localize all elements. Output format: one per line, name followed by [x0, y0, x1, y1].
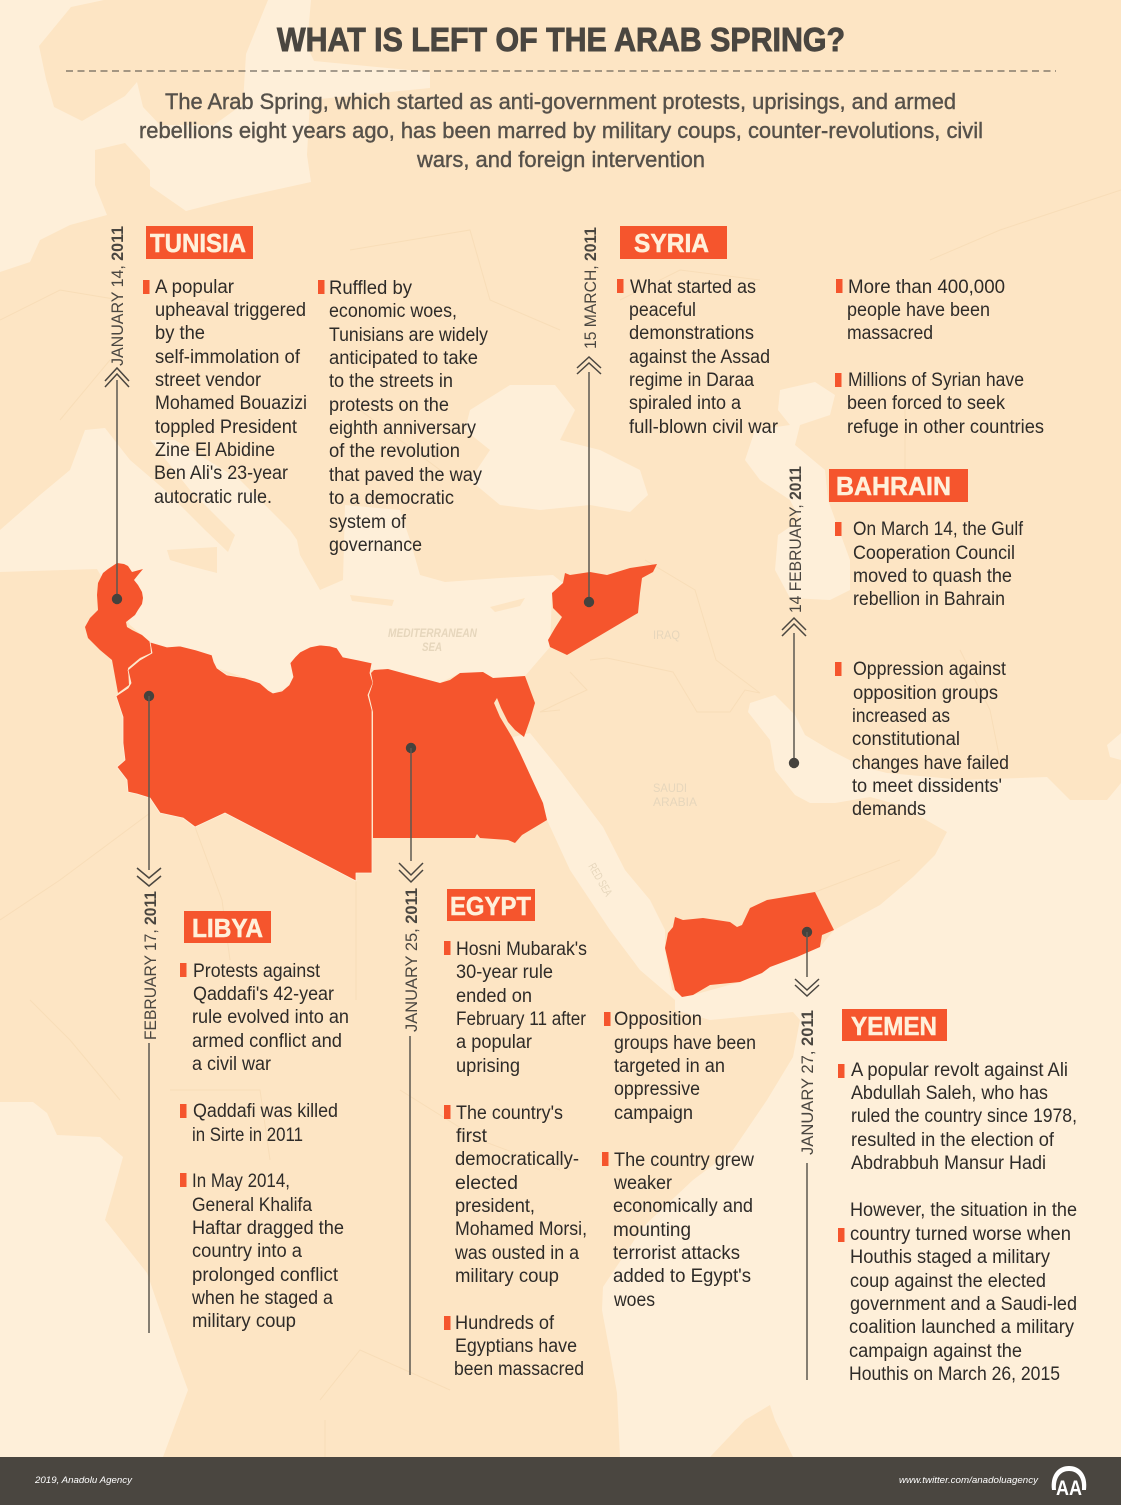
text block: Yemen: Abdrabbuh Mansur Hadi — [851, 1153, 1046, 1174]
intro text: The Arab Spring, which started as anti-government protests, uprisings, and armed — [165, 89, 956, 114]
heading: Libya: LIBYA — [192, 913, 263, 943]
text block: Libya: Haftar dragged the — [192, 1218, 344, 1239]
footer: credit: 2019, Anadolu Agency — [34, 1475, 133, 1486]
timeline: Syria date and pointer: 15 MARCH, 2011 — [581, 227, 600, 349]
country: Syria — [548, 564, 657, 655]
text block: Libya: military coup — [192, 1311, 296, 1332]
text block: Tunisia first column: A popular — [155, 277, 235, 298]
text block: Yemen: campaign against the — [849, 1341, 1022, 1362]
text block: Tunisia second column: Tunisians are widely — [329, 325, 488, 346]
text block: Egypt first column: elected — [455, 1173, 518, 1194]
text block: Yemen: Houthis staged a military — [850, 1247, 1050, 1268]
icon: Anadolu Agency logo: AA — [1056, 1477, 1082, 1500]
text block: Egypt first column: Hosni Mubarak's — [456, 939, 587, 960]
text block: Tunisia second column — [318, 278, 488, 556]
text block: Egypt second column — [602, 1009, 756, 1311]
text block: Tunisia second column: anticipated to take — [329, 348, 478, 369]
text block: Tunisia first column — [143, 277, 307, 508]
text block: Egypt first column: democratically- — [455, 1149, 579, 1170]
text block: Egypt second column: groups have been — [614, 1033, 756, 1054]
text block: Egypt first column: uprising — [456, 1056, 520, 1077]
text block: Yemen: resulted in the election of — [851, 1130, 1055, 1151]
timeline: Libya date and pointer — [137, 691, 161, 1333]
text block: Egypt second column: weaker — [613, 1173, 673, 1194]
text block: Tunisia second column: protests on the — [329, 395, 449, 416]
text block: Tunisia second column: system of — [329, 512, 407, 533]
text block: Bahrain: opposition groups — [853, 683, 998, 704]
text block: Syria second column: people have been — [847, 300, 990, 321]
text block: Bahrain: rebellion in Bahrain — [853, 589, 1005, 610]
intro text — [139, 89, 983, 172]
text block: Syria first column: full-blown civil war — [629, 417, 779, 438]
text block: Bahrain: to meet dissidents' — [852, 776, 1002, 797]
panel: Libya — [137, 691, 349, 1333]
text block: Syria second column: massacred — [847, 323, 933, 344]
text block: Tunisia second column: governance — [329, 535, 422, 556]
text block: Syria second column — [835, 277, 1044, 438]
intro text: wars, and foreign intervention — [416, 147, 705, 172]
text block: Yemen: However, the situation in the — [850, 1200, 1077, 1221]
map label: Red Sea: RED SEA — [585, 862, 614, 899]
country: Tunisia — [85, 563, 151, 693]
text block: Egypt first column: 30-year rule — [456, 962, 553, 983]
text block: Syria first column: What started as — [630, 277, 756, 298]
text block: Tunisia first column: Zine El Abidine — [155, 440, 275, 461]
text block: Tunisia first column: street vendor — [155, 370, 262, 391]
text block: Yemen: country turned worse when — [850, 1224, 1071, 1245]
text block: Egypt first column: been massacred — [454, 1359, 584, 1380]
timeline: Tunisia date and pointer — [105, 226, 129, 604]
footer: social link: www.twitter.com/anadoluagency — [899, 1475, 1039, 1486]
timeline: Bahrain date and pointer: 14 FEBRUARY, 2011 — [786, 466, 805, 613]
highlighted countries map — [85, 563, 834, 997]
text block: Bahrain: increased as — [852, 706, 950, 727]
panel: Syria — [577, 226, 1044, 607]
text block: Libya: prolonged conflict — [192, 1265, 339, 1286]
text block: Bahrain — [835, 519, 1024, 820]
text block: Libya: armed conflict and — [192, 1031, 342, 1052]
text block: Libya: in Sirte in 2011 — [192, 1125, 303, 1146]
text block: Syria first column: spiraled into a — [629, 393, 741, 414]
timeline: Yemen date and pointer — [795, 927, 819, 1380]
panel: Egypt — [399, 743, 756, 1380]
text block: Libya: a civil war — [192, 1054, 272, 1075]
country: Libya — [116, 642, 373, 881]
text block: Syria second column: Millions of Syrian have — [848, 370, 1024, 391]
text block: Tunisia second column: to a democratic — [329, 488, 454, 509]
text block: Libya: country into a — [192, 1241, 302, 1262]
text block: Egypt second column: Opposition — [614, 1009, 702, 1030]
text block: Libya: Protests against — [193, 961, 321, 982]
text block: Libya: when he staged a — [191, 1288, 333, 1309]
text block: Egypt first column: president, — [455, 1196, 535, 1217]
heading: Syria — [620, 226, 727, 259]
country: Egypt — [369, 669, 547, 843]
timeline: Tunisia date and pointer: JANUARY 14, 2011 — [108, 226, 127, 366]
text block: Tunisia second column: that paved the way — [329, 465, 482, 486]
title: WHAT IS LEFT OF THE ARAB SPRING? — [277, 21, 845, 58]
heading: Egypt: EGYPT — [450, 891, 531, 921]
map label: Saudi Arabia: SAUDI — [653, 783, 687, 795]
timeline: Libya date and pointer: FEBRUARY 17, 2011 — [141, 891, 160, 1040]
text block: Egypt second column: targeted in an — [614, 1056, 725, 1077]
text block: Tunisia second column: to the streets in — [329, 371, 453, 392]
text block: Yemen — [838, 1060, 1077, 1385]
text block: Syria first column: demonstrations — [629, 323, 754, 344]
text block: Libya: General Khalifa — [192, 1195, 312, 1216]
text block: Syria first column: against the Assad — [629, 347, 770, 368]
text block: Tunisia first column: toppled President — [155, 417, 298, 438]
text block: Egypt first column: ended on — [456, 986, 532, 1007]
text block: Tunisia second column: Ruffled by — [329, 278, 412, 299]
text block: Tunisia first column: self-immolation of — [155, 347, 301, 368]
heading: Yemen: YEMEN — [851, 1011, 937, 1041]
text block: Tunisia first column: Mohamed Bouazizi — [155, 393, 307, 414]
heading: Syria: SYRIA — [634, 228, 709, 258]
icon: Anadolu Agency logo — [1052, 1466, 1086, 1500]
text block: Egypt first column: was ousted in a — [454, 1243, 579, 1264]
text block: Bahrain: Cooperation Council — [853, 543, 1015, 564]
text block: Bahrain: Oppression against — [853, 659, 1007, 680]
text block: Bahrain: On March 14, the Gulf — [853, 519, 1024, 540]
text block: Egypt first column: a popular — [456, 1032, 533, 1053]
text block: Egypt second column: oppressive — [614, 1079, 700, 1100]
text block: Egypt second column: terrorist attacks — [613, 1243, 740, 1264]
text block: Syria second column: More than 400,000 — [848, 277, 1005, 298]
footer bar — [0, 1457, 1121, 1505]
text block: Syria first column: regime in Daraa — [629, 370, 754, 391]
map label: Mediterranean Sea: SEA — [422, 642, 442, 654]
panel: Bahrain — [782, 466, 1024, 820]
text block: Libya — [180, 961, 349, 1332]
country: Yemen — [665, 892, 834, 997]
text block: Tunisia first column: autocratic rule. — [154, 487, 272, 508]
text block: Egypt second column: woes — [613, 1290, 655, 1311]
heading: Tunisia: TUNISIA — [150, 228, 246, 258]
text block: Yemen: government and a Saudi-led — [850, 1294, 1077, 1315]
map label: Saudi Arabia: ARABIA — [653, 797, 697, 809]
text block: Bahrain: changes have failed — [852, 753, 1009, 774]
text block: Syria second column: been forced to seek — [847, 393, 1005, 414]
text block: Tunisia first column: Ben Ali's 23-year — [154, 463, 289, 484]
heading: Bahrain: BAHRAIN — [836, 471, 951, 501]
text block: Libya: Qaddafi was killed — [193, 1101, 338, 1122]
timeline: Egypt date and pointer — [399, 743, 423, 1375]
text block: Egypt second column: added to Egypt's — [613, 1266, 751, 1287]
text block: Yemen: Abdullah Saleh, who has — [851, 1083, 1048, 1104]
text block: Yemen: ruled the country since 1978, — [851, 1106, 1077, 1127]
timeline: Bahrain date and pointer — [782, 466, 806, 768]
text block: Tunisia first column: upheaval triggered — [155, 300, 306, 321]
text block: Egypt first column — [444, 939, 587, 1380]
text block: Egypt second column: economically and — [613, 1196, 753, 1217]
text block: Bahrain: demands — [852, 799, 926, 820]
timeline: Syria date and pointer — [577, 227, 601, 607]
map label: Mediterranean Sea — [388, 628, 478, 654]
map label: Saudi Arabia — [653, 783, 697, 809]
intro text: rebellions eight years ago, has been marred by military coups, counter-revolutions, civil — [139, 118, 983, 143]
text block: Tunisia second column: eighth anniversary — [329, 418, 476, 439]
text block: Tunisia second column: of the revolution — [329, 441, 460, 462]
text block: Egypt second column: mounting — [613, 1220, 691, 1241]
text block: Libya: In May 2014, — [192, 1171, 290, 1192]
text block: Syria first column: peaceful — [629, 300, 696, 321]
text block: Egypt first column: first — [456, 1126, 488, 1147]
text block: Egypt second column: campaign — [614, 1103, 693, 1124]
text block: Bahrain: moved to quash the — [853, 566, 1012, 587]
text block: Egypt second column: The country grew — [614, 1150, 754, 1171]
text block: Yemen: Houthis on March 26, 2015 — [849, 1364, 1060, 1385]
text block: Tunisia second column: economic woes, — [329, 301, 457, 322]
panel: Yemen — [795, 927, 1077, 1385]
text block: Tunisia first column: by the — [155, 323, 205, 344]
text block: Yemen: coalition launched a military — [849, 1317, 1074, 1338]
timeline: Egypt date and pointer: JANUARY 25, 2011 — [402, 888, 421, 1032]
map label: Mediterranean Sea: MEDITERRANEAN — [388, 628, 478, 640]
text block: Egypt first column: Egyptians have — [455, 1336, 577, 1357]
text block: Egypt first column: February 11 after — [456, 1009, 587, 1030]
map label: Iraq: IRAQ — [653, 630, 680, 642]
text block: Yemen: coup against the elected — [850, 1271, 1046, 1292]
text block: Syria second column: refuge in other countries — [847, 417, 1044, 438]
text block: Libya: Qaddafi's 42-year — [193, 984, 335, 1005]
text block: Egypt first column: military coup — [455, 1266, 559, 1287]
text block: Bahrain: constitutional — [852, 729, 960, 750]
text block: Libya: rule evolved into an — [192, 1007, 349, 1028]
text block: Egypt first column: The country's — [456, 1103, 563, 1124]
text block: Syria first column — [617, 277, 779, 438]
text block: Egypt first column: Hundreds of — [455, 1313, 555, 1334]
text block: Yemen: A popular revolt against Ali — [851, 1060, 1068, 1081]
panel: Tunisia — [105, 226, 488, 604]
timeline: Yemen date and pointer: JANUARY 27, 2011 — [798, 1010, 817, 1155]
text block: Egypt first column: Mohamed Morsi, — [455, 1219, 587, 1240]
